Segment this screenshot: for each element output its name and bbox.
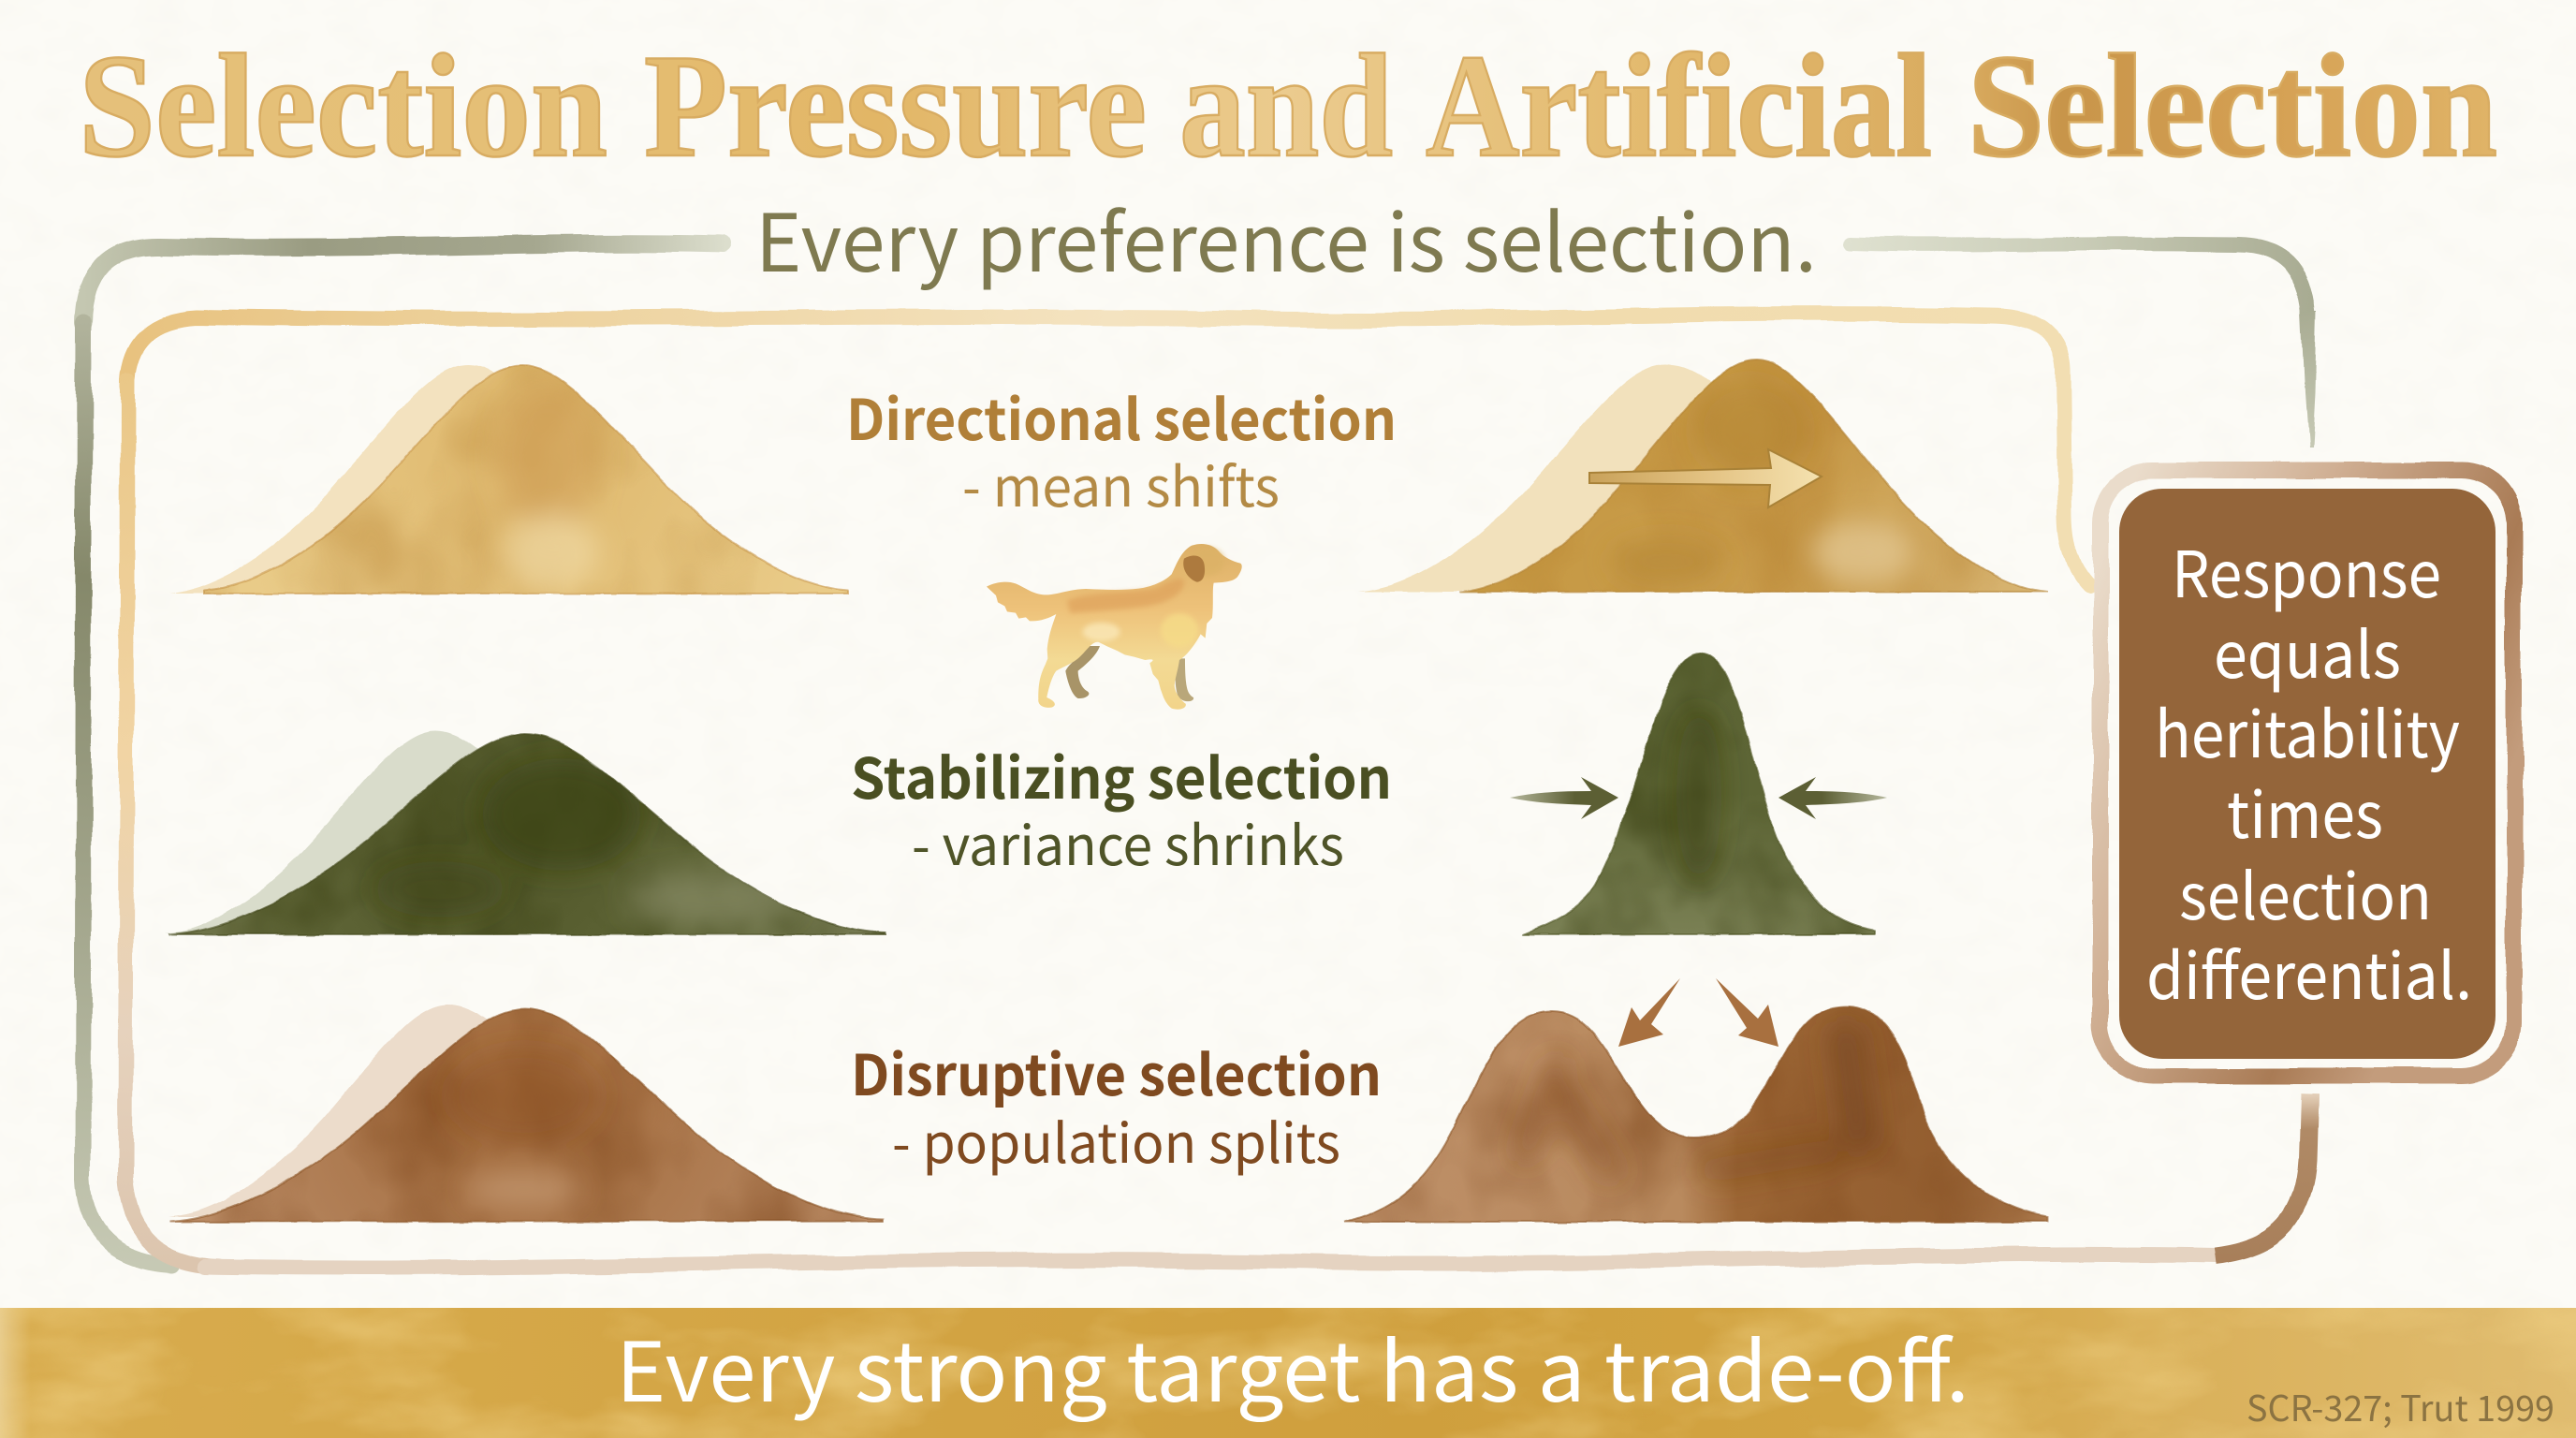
curve: disruptive row left: [168, 1005, 883, 1222]
inner frame: gold top, tan bottom: [125, 314, 2218, 1269]
banner text: Every strong target has a trade-off.: [616, 1307, 1969, 1426]
curve: directional row right with arrow: [1358, 360, 2047, 592]
arrow: split right: [1716, 978, 1778, 1047]
connector from box to bottom line: [2216, 1093, 2310, 1256]
text: mean shifts: - mean shifts: [962, 444, 1280, 522]
callout ring: [2100, 470, 2514, 1076]
arrow: split left: [1618, 978, 1680, 1047]
callout text: [2146, 523, 2472, 1018]
title: [79, 24, 2497, 188]
text: population splits: - population splits: [892, 1100, 1340, 1179]
curve: disruptive row right, bimodal: [1344, 1006, 2047, 1222]
callout text: times: [2227, 764, 2383, 857]
callout text: heritability: [2155, 683, 2460, 776]
outer sage loop frame: [82, 243, 2317, 1265]
curve: directional row left: [168, 364, 848, 594]
curve: stabilizing row left: [164, 730, 886, 934]
arrow: right shift: [1589, 449, 1822, 507]
subtitle: Every preference is selection.: [755, 180, 1817, 295]
title: and: [1179, 24, 1393, 188]
heading: stabilizing: Stabilizing selection: [851, 734, 1392, 815]
curve: stabilizing row right: [1522, 653, 1875, 934]
dog illustration: [987, 544, 1242, 710]
title: Selection: [1968, 24, 2497, 188]
bottom banner: [0, 1307, 2576, 1438]
heading: disruptive: Disruptive selection: [851, 1031, 1382, 1112]
arrow: squeeze from right: [1778, 777, 1887, 819]
callout text: equals: [2214, 604, 2401, 697]
text: variance shrinks: - variance shrinks: [912, 802, 1344, 881]
arrow: squeeze from left: [1510, 777, 1618, 819]
source citation: SCR-327; Trut 1999: [2247, 1380, 2554, 1431]
title: Selection: [79, 24, 607, 188]
callout text: selection: [2179, 845, 2432, 938]
callout text: Response: [2172, 523, 2441, 616]
callout box: [2119, 489, 2496, 1059]
callout text: differential.: [2146, 925, 2472, 1018]
title: Artificial: [1426, 24, 1932, 188]
title: Pressure: [644, 24, 1147, 188]
heading: directional: Directional selection: [846, 375, 1397, 457]
